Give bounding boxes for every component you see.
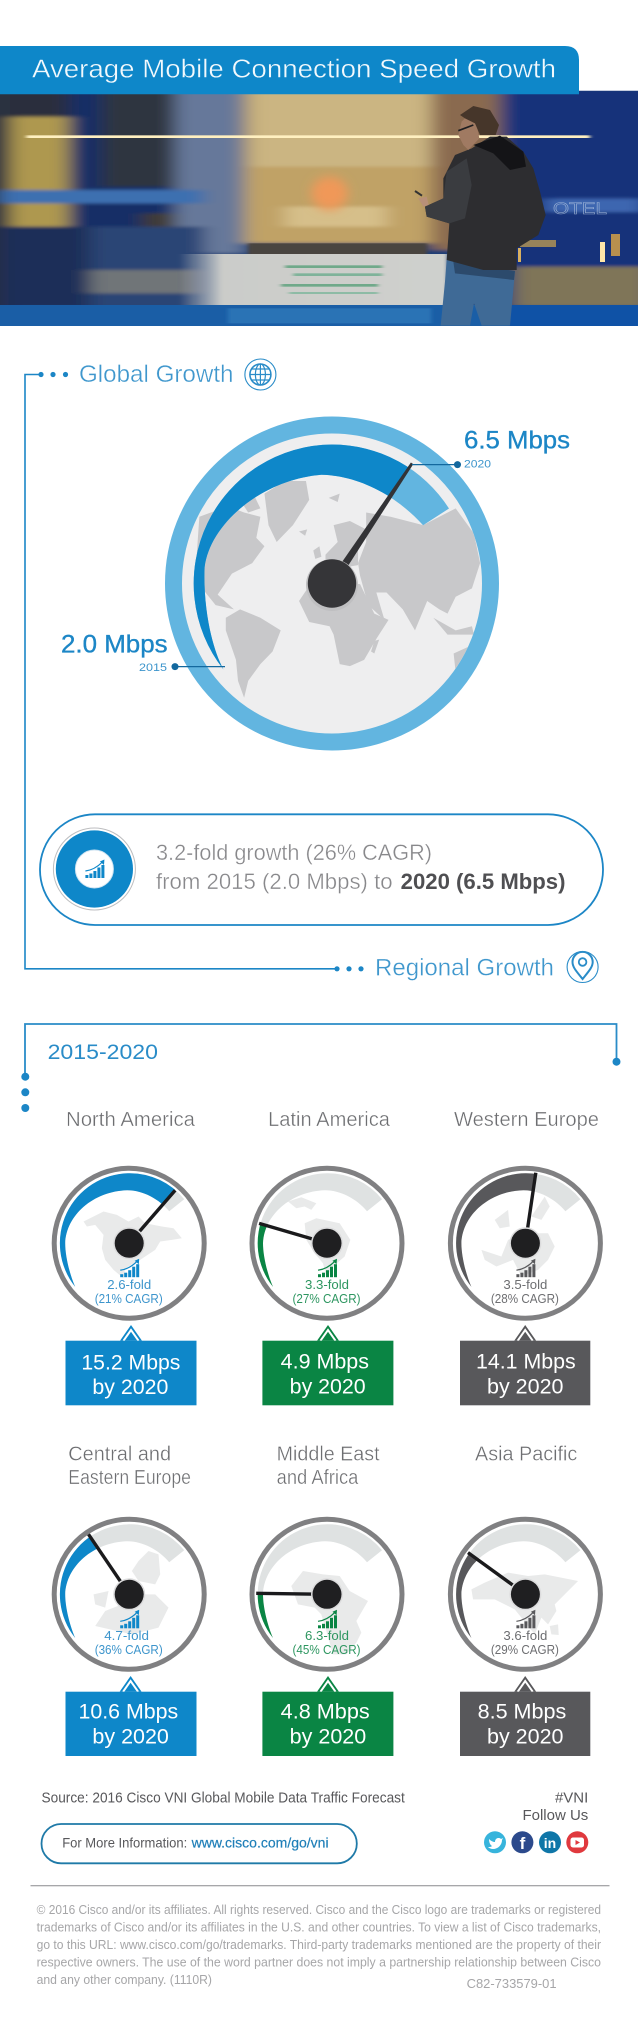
- source line: Source: 2016 Cisco VNI Global Mobile Data Traffic Forecast: [42, 1789, 406, 1806]
- hero photo: man with phone in front of a blurred train: [0, 80, 638, 326]
- legal text: respective owners. The use of the word partner does not imply a partnership relationship between Cisco: [37, 1955, 601, 1969]
- legal text: © 2016 Cisco and/or its affiliates. All rights reserved. Cisco and the Cisco logo are trademarks or registered: [37, 1903, 601, 1917]
- icon: facebook: f: [520, 1834, 526, 1853]
- more information pill: [42, 1824, 357, 1863]
- summary text: [156, 840, 566, 894]
- speed box: Western Europe: [460, 1325, 590, 1405]
- gauge ring: [174, 425, 490, 742]
- gauge: Central and Eastern Europe: (36% CAGR): [95, 1643, 163, 1657]
- blurred sign lettering on the train: OTEL: [553, 199, 607, 218]
- gauge: Asia Pacific: 3.6-fold: [503, 1629, 547, 1643]
- map: Africa: [291, 1571, 368, 1654]
- heading: Global Growth: Global Growth: [79, 361, 234, 388]
- gauge: Middle East and Africa: [252, 1519, 402, 1669]
- heading: Regional Growth: Regional Growth: [375, 954, 554, 982]
- big speedometer gauge: [174, 425, 490, 742]
- region label: Central and Eastern Europe: [68, 1444, 191, 1489]
- legal text: trademarks of Cisco and/or its affiliates in the U.S. and other countries. To view a list of Cisco trademarks,: [37, 1920, 601, 1934]
- map: Western Europe: [481, 1197, 555, 1277]
- speed box: Middle East and Africa: by 2020: [290, 1725, 366, 1748]
- man figure: [415, 106, 546, 326]
- legal text: [37, 1903, 601, 1987]
- speed box: Middle East and Africa: 4.8 Mbps: [281, 1701, 370, 1724]
- speed box: Central and Eastern Europe: 10.6 Mbps: [78, 1701, 178, 1724]
- hashtag and follow us: Follow Us: [522, 1807, 588, 1824]
- speed box: North America: 15.2 Mbps: [81, 1351, 180, 1374]
- gauge: Asia Pacific: (29% CAGR): [491, 1643, 559, 1657]
- gauge: Western Europe: [450, 1168, 600, 1318]
- speed box: Western Europe: by 2020: [487, 1375, 564, 1398]
- gauge: Latin America: (27% CAGR): [292, 1292, 360, 1306]
- bracket connector: regional section: [21, 1024, 621, 1112]
- summary text: 3.2-fold growth (26% CAGR): [156, 840, 432, 865]
- speed box: Latin America: by 2020: [290, 1375, 366, 1398]
- title: Average Mobile Connection Speed Growth: [32, 54, 556, 84]
- more information pill: For More Information:: [62, 1834, 187, 1850]
- icon: facebook: [511, 1831, 533, 1853]
- speed box: Asia Pacific: by 2020: [487, 1725, 564, 1748]
- hub: [306, 559, 358, 611]
- icon: twitter: [484, 1831, 506, 1853]
- summary text: from 2015 (2.0 Mbps) to: [156, 869, 393, 894]
- gauge: Middle East and Africa: 6.3-fold: [305, 1629, 349, 1643]
- speed box: Middle East and Africa: [262, 1676, 393, 1756]
- more information pill: www.cisco.com/go/vni: [191, 1834, 329, 1850]
- icon: globe: [245, 359, 276, 390]
- title banner: [0, 46, 579, 94]
- summary text: 2020 (6.5 Mbps): [401, 869, 566, 894]
- callout: 6.5 Mbps 2020: 6.5 Mbps: [464, 427, 570, 455]
- gauge: Asia Pacific: [450, 1519, 600, 1669]
- gauge: Middle East and Africa: (45% CAGR): [292, 1643, 360, 1657]
- gauge: Western Europe: 3.5-fold: [503, 1278, 547, 1292]
- speed box: Western Europe: 14.1 Mbps: [476, 1350, 576, 1373]
- icon: linkedin: in: [544, 1835, 556, 1851]
- icon: growth chart badge: [53, 828, 135, 910]
- speed arc: remaining range: [194, 444, 449, 670]
- region label: Central and Eastern Europe: Central and: [68, 1444, 171, 1466]
- gauge: Western Europe: (28% CAGR): [491, 1292, 559, 1306]
- icon: linkedin: [539, 1831, 561, 1853]
- icon: youtube: [566, 1831, 588, 1853]
- map: Central and Eastern Europe: [94, 1551, 169, 1634]
- speed box: Central and Eastern Europe: by 2020: [92, 1725, 169, 1748]
- document code: C82-733579-01: [467, 1977, 557, 1991]
- callout: 2.0 Mbps 2015: 2.0 Mbps: [61, 630, 168, 658]
- map: North America: [84, 1212, 182, 1278]
- region label: North America: North America: [66, 1109, 196, 1131]
- icon: location pin: [567, 952, 598, 982]
- gauge: Latin America: 3.3-fold: [305, 1278, 349, 1292]
- map: Asia Pacific: [471, 1573, 578, 1635]
- gauge: North America: (21% CAGR): [95, 1292, 163, 1306]
- speed arc: reached range: [194, 444, 408, 670]
- legal text: go to this URL: www.cisco.com/go/trademarks. Third-party trademarks mentioned are the property of their: [37, 1938, 601, 1952]
- callout: 2.0 Mbps 2015: [61, 630, 225, 674]
- panel: global growth summary pill: [40, 814, 603, 925]
- region label: Middle East and Africa: [277, 1444, 380, 1489]
- region label: Central and Eastern Europe: Eastern Europe: [68, 1467, 191, 1489]
- callout: 6.5 Mbps 2020: [412, 427, 570, 470]
- speed box: Central and Eastern Europe: [66, 1676, 196, 1756]
- speed box: Asia Pacific: 8.5 Mbps: [478, 1701, 566, 1724]
- needle: [329, 462, 413, 586]
- region label: Asia Pacific: Asia Pacific: [475, 1444, 577, 1466]
- legal text: and any other company. (1110R): [37, 1973, 212, 1987]
- hashtag and follow us: #VNI: [555, 1790, 588, 1807]
- speed box: North America: by 2020: [92, 1376, 168, 1399]
- gauge: North America: 2.6-fold: [107, 1278, 151, 1292]
- speed box: Latin America: 4.9 Mbps: [281, 1350, 369, 1373]
- speed box: North America: [66, 1325, 196, 1405]
- heading: 2015-2020: 2015-2020: [48, 1041, 158, 1064]
- speed box: Latin America: [262, 1325, 393, 1405]
- region label: Middle East and Africa: Middle East: [277, 1444, 380, 1466]
- gauge: Central and Eastern Europe: [54, 1519, 204, 1669]
- world map: [195, 481, 480, 698]
- callout: 2.0 Mbps 2015: 2015: [139, 662, 167, 674]
- speed box: Asia Pacific: [460, 1676, 590, 1756]
- map: Latin America: [288, 1197, 350, 1277]
- region label: Middle East and Africa: and Africa: [277, 1467, 359, 1489]
- gauge: Latin America: [252, 1168, 402, 1318]
- gauge: North America: [54, 1168, 204, 1318]
- bracket connector: global to regional: [25, 372, 364, 971]
- region label: Western Europe: Western Europe: [454, 1109, 599, 1131]
- region label: Latin America: Latin America: [268, 1109, 391, 1131]
- hashtag and follow us: [522, 1790, 588, 1824]
- callout: 6.5 Mbps 2020: 2020: [464, 458, 491, 470]
- gauge: Central and Eastern Europe: 4.7-fold: [104, 1629, 149, 1643]
